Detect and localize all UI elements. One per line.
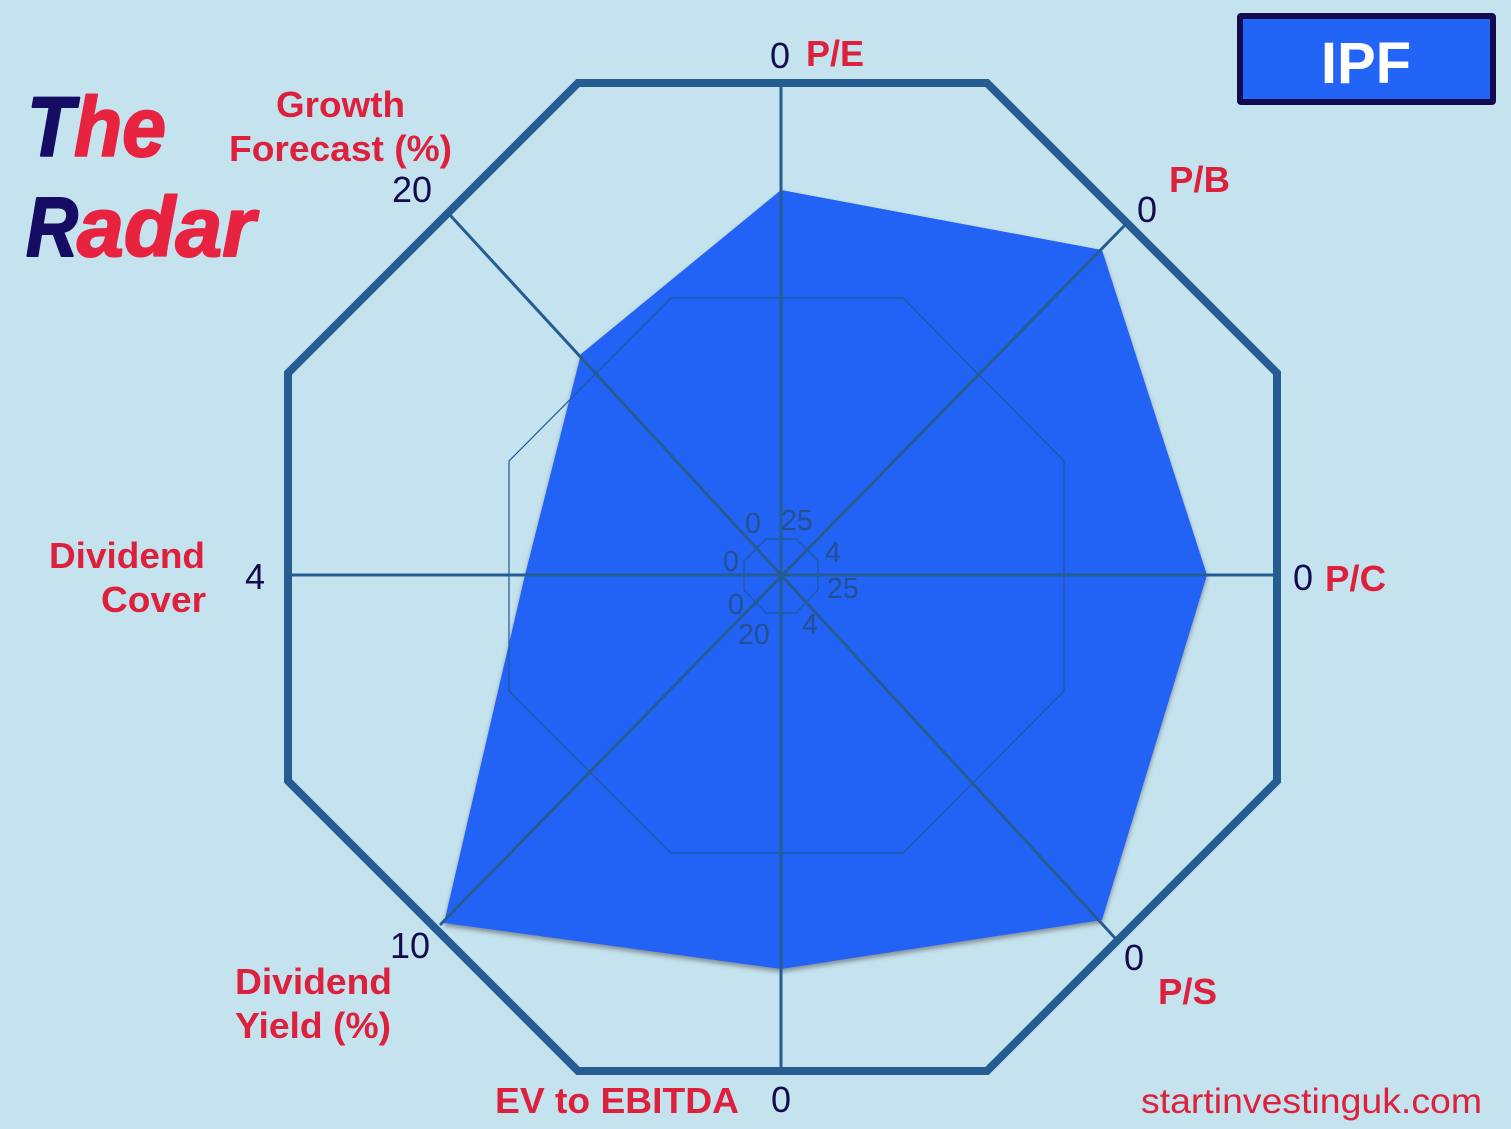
outer scale numbers: 0 — [771, 1079, 791, 1120]
radar spokes — [290, 85, 1274, 1068]
axis label: Growth Forecast: Forecast (%) — [229, 128, 452, 169]
title: The Radar: T — [27, 80, 80, 174]
axis label: Dividend Yield: Yield (%) — [235, 1005, 391, 1046]
axis label: Growth Forecast: Growth — [276, 84, 405, 125]
outer scale numbers: 0 — [1124, 937, 1144, 978]
centre scale numbers: 4 — [825, 537, 841, 569]
centre scale numbers: 0 — [723, 546, 739, 578]
inner scale octagon — [744, 539, 818, 613]
title: The Radar: he — [74, 80, 166, 174]
axis label: Growth Forecast — [229, 84, 452, 169]
axis label: Dividend Cover: Dividend — [49, 535, 205, 576]
centre scale numbers: 25 — [781, 505, 813, 537]
ticker badge: IPF — [1240, 16, 1493, 102]
axis label: Dividend Yield — [235, 961, 392, 1046]
centre scale numbers: 20 — [738, 619, 770, 651]
outer scale numbers: 20 — [392, 169, 432, 210]
centre scale numbers: 25 — [827, 573, 859, 605]
radar data polygon — [444, 190, 1207, 969]
title: The Radar: adar — [77, 180, 259, 274]
website credit: startinvestinguk.com — [1141, 1081, 1482, 1121]
outer scale numbers: 0 — [1293, 557, 1313, 598]
outer scale numbers — [245, 35, 1313, 1120]
axis label: Dividend Cover: Cover — [101, 579, 206, 620]
centre scale numbers: 4 — [802, 609, 818, 641]
outer octagon — [288, 83, 1277, 1071]
axis label: EV to EBITDA: EV to EBITDA — [495, 1080, 739, 1121]
axis label: Dividend Yield: Dividend — [235, 961, 392, 1002]
centre scale numbers: 0 — [728, 589, 744, 621]
axis label: P/C: P/C — [1325, 558, 1386, 599]
outer scale numbers: 0 — [770, 35, 790, 76]
axis label: P/S: P/S — [1158, 971, 1217, 1012]
middle scale octagon — [509, 298, 1064, 853]
outer scale numbers: 10 — [390, 925, 430, 966]
outer scale numbers: 0 — [1137, 189, 1157, 230]
title: The Radar — [26, 80, 259, 274]
ticker badge: IPF: IPF — [1321, 31, 1411, 96]
centre scale numbers — [723, 505, 859, 651]
axis label: P/E: P/E — [806, 33, 864, 74]
axis label: Dividend Cover — [49, 535, 206, 620]
title: The Radar: R — [26, 180, 78, 274]
axis label: P/B: P/B — [1169, 159, 1230, 200]
outer scale numbers: 4 — [245, 556, 265, 597]
centre scale numbers: 0 — [745, 508, 761, 540]
